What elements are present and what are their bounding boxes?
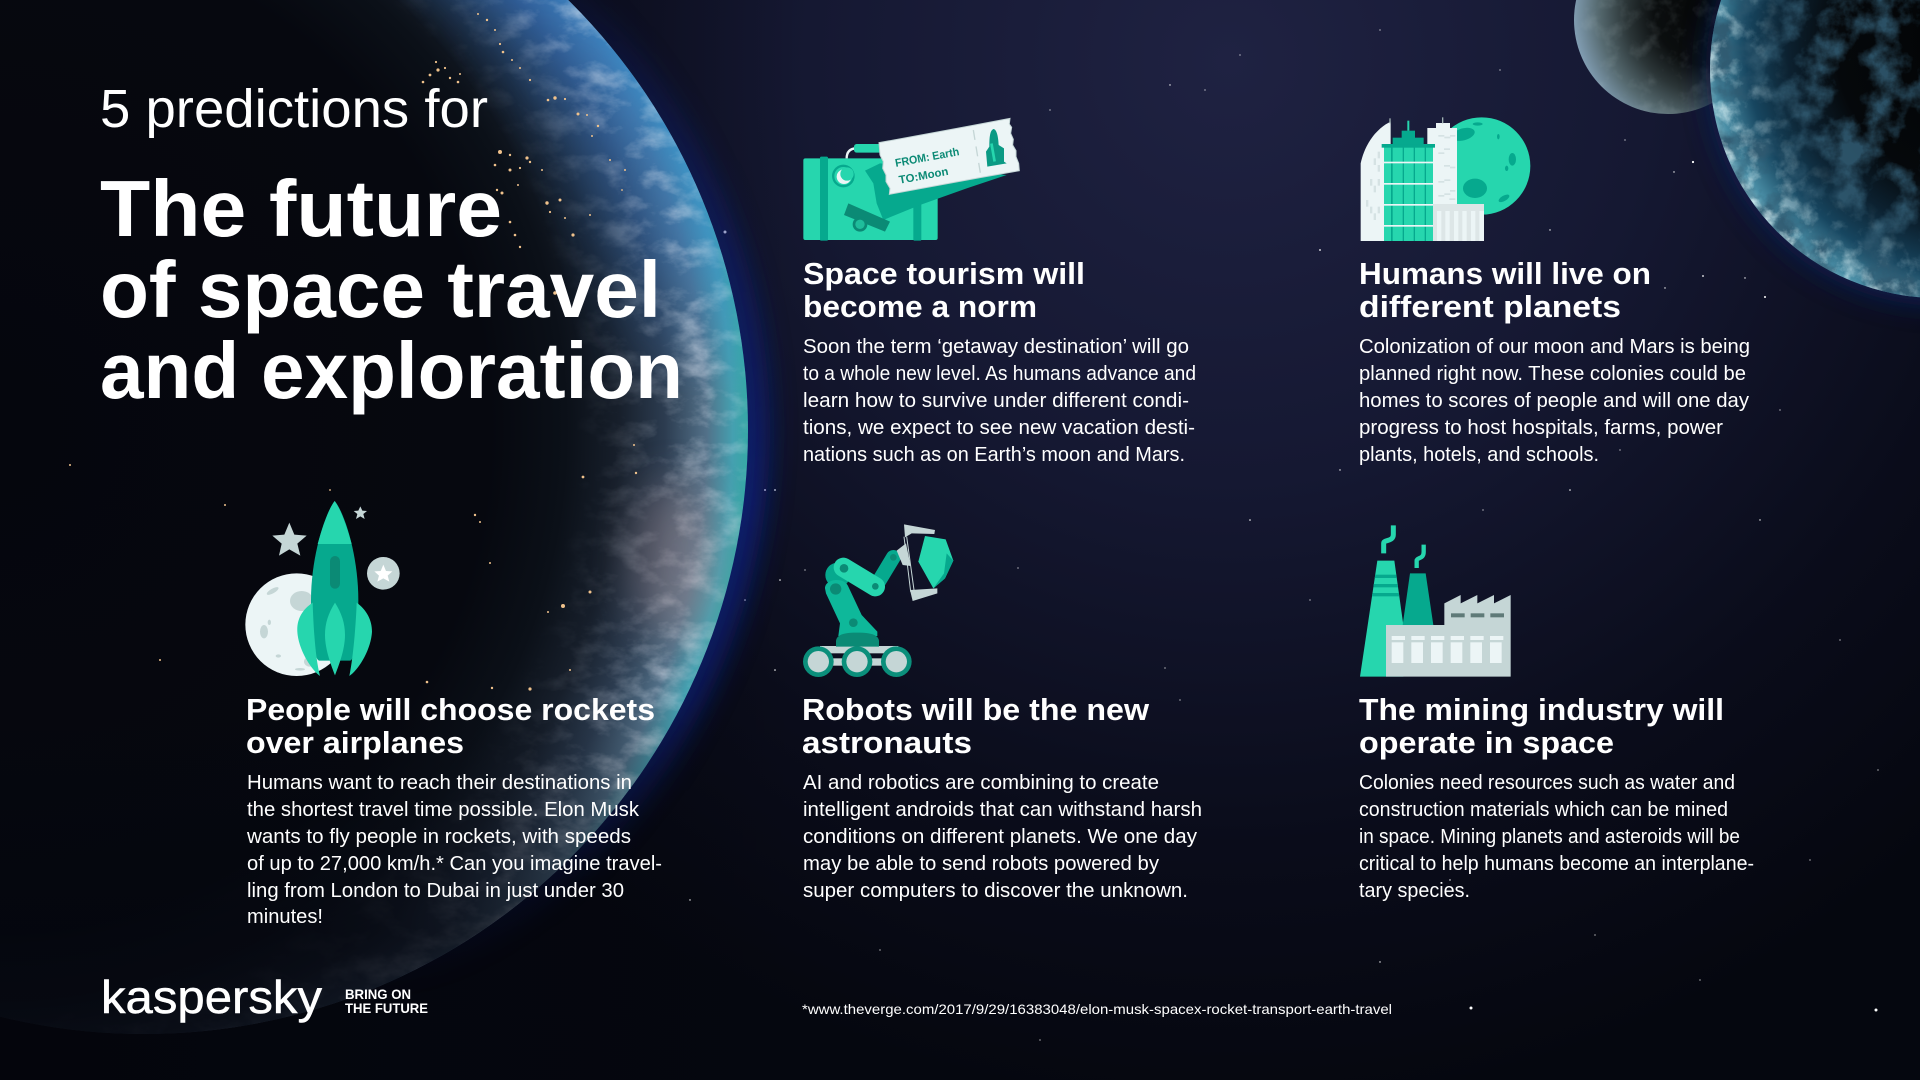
tagline: BRING ON [345, 986, 411, 1002]
title block [100, 79, 683, 415]
icon: suitcase and ticket [803, 118, 1019, 241]
body text: learn how to survive under different condi- [803, 389, 1189, 412]
body text: critical to help humans become an interplane- [1359, 852, 1754, 875]
body text: the shortest travel time possible. Elon Musk [247, 798, 640, 821]
body text: construction materials which can be mined [1359, 798, 1728, 821]
main title [100, 164, 683, 415]
panel: mining [1359, 525, 1754, 902]
city lights [69, 13, 637, 691]
body text: progress to host hospitals, farms, power [1359, 416, 1723, 439]
body text: intelligent androids that can withstand harsh [803, 798, 1202, 821]
body text [1359, 771, 1754, 902]
heading: The mining industry will [1359, 692, 1724, 727]
heading [246, 692, 655, 760]
body text: nations such as on Earth’s moon and Mars. [803, 443, 1185, 466]
panel: living on planets [1359, 117, 1750, 466]
body text: tions, we expect to see new vacation desti- [803, 416, 1195, 439]
panel: robots [802, 524, 1202, 902]
heading [1359, 692, 1724, 760]
logo: kaspersky: kaspersky [101, 971, 322, 1023]
body text: in space. Mining planets and asteroids will be [1359, 825, 1740, 848]
body text: of up to 27,000 km/h.* Can you imagine travel- [247, 852, 662, 875]
body text [246, 771, 662, 928]
heading: Humans will live on [1359, 256, 1651, 291]
icon: city and moon [1361, 117, 1530, 241]
icon: suitcase and ticket: TO:Moon [898, 166, 949, 187]
stars [689, 29, 1879, 1041]
heading: over airplanes [246, 725, 464, 760]
body text [1359, 335, 1750, 466]
body text: super computers to discover the unknown. [803, 879, 1188, 902]
panel: rockets [245, 501, 662, 928]
tagline [345, 986, 428, 1016]
body text: homes to scores of people and will one day [1359, 389, 1750, 412]
main title: The future [100, 164, 502, 253]
heading: operate in space [1359, 725, 1614, 760]
tagline: THE FUTURE [345, 1000, 428, 1016]
heading: Robots will be the new [802, 692, 1150, 727]
body text: conditions on different planets. We one day [803, 825, 1198, 848]
body text: Colonies need resources such as water and [1359, 771, 1735, 794]
body text: to a whole new level. As humans advance and [803, 362, 1196, 385]
heading: astronauts [802, 725, 972, 760]
kicker: 5 predictions for [100, 79, 488, 139]
heading: become a norm [803, 289, 1037, 324]
heading: Space tourism will [803, 256, 1085, 291]
body text: AI and robotics are combining to create [803, 771, 1159, 794]
heading [802, 692, 1150, 760]
body text: Colonization of our moon and Mars is being [1359, 335, 1750, 358]
body text: wants to fly people in rockets, with speeds [246, 825, 631, 848]
heading [1359, 256, 1651, 324]
icon: robot arm rover [803, 524, 953, 677]
icon: rocket and moon [245, 501, 400, 676]
icon: factory [1360, 525, 1511, 677]
heading [803, 256, 1085, 324]
body text: minutes! [247, 905, 323, 928]
body text: ling from London to Dubai in just under 30 [247, 879, 624, 902]
body text: may be able to send robots powered by [803, 852, 1160, 875]
body text: tary species. [1359, 879, 1470, 902]
panel: space tourism [803, 118, 1196, 466]
body text: Soon the term ‘getaway destination’ will go [803, 335, 1189, 358]
heading: People will choose rockets [246, 692, 655, 727]
main title: of space travel [100, 245, 661, 334]
body text: planned right now. These colonies could be [1359, 362, 1746, 385]
planet: large blue moon, top right [1700, 0, 1920, 306]
body text: Humans want to reach their destinations in [247, 771, 632, 794]
icon: suitcase and ticket: FROM: Earth [894, 146, 960, 170]
body text [803, 771, 1202, 902]
body text [803, 335, 1196, 466]
planet: small grey moon, top right [1574, 0, 1721, 114]
planet: Earth [0, 0, 770, 1040]
logo: kaspersky [101, 971, 428, 1023]
body text: plants, hotels, and schools. [1359, 443, 1599, 466]
main title: and exploration [100, 326, 683, 415]
footnote source: *www.theverge.com/2017/9/29/16383048/elon-musk-spacex-rocket-transport-earth-travel [802, 1001, 1392, 1017]
heading: different planets [1359, 289, 1621, 324]
